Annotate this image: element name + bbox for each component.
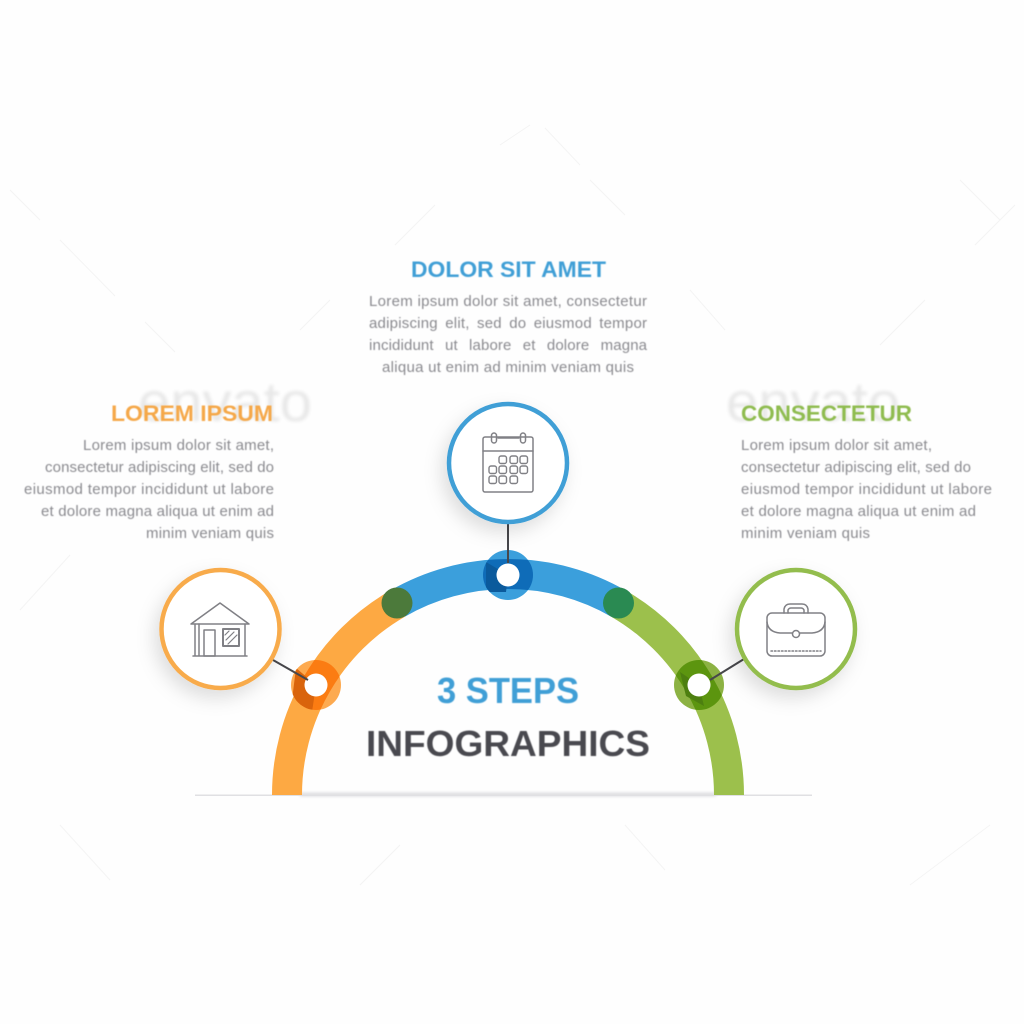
body: step 2: adipiscing elit, sed do eiusmod tempor bbox=[369, 315, 647, 332]
step 1 text block bbox=[24, 401, 274, 542]
watermark: left: envato bbox=[138, 370, 312, 433]
baseline shadow bbox=[195, 793, 812, 796]
watermark: right: envato bbox=[726, 370, 900, 433]
icon: calendar bbox=[483, 433, 533, 492]
title line: infographics: INFOGRAPHICS bbox=[366, 723, 650, 764]
body: step 1: Lorem ipsum dolor sit amet, bbox=[83, 437, 274, 454]
step 2 text block bbox=[369, 257, 648, 376]
band: blue segment bbox=[398, 574, 618, 604]
centre title bbox=[366, 670, 650, 764]
body: step 1: eiusmod tempor incididunt ut labore bbox=[24, 481, 274, 498]
connector: orange bbox=[273, 660, 308, 680]
connector: blue bbox=[507, 523, 509, 563]
icon circle: orange bbox=[162, 570, 280, 688]
body: step 1: minim veniam quis bbox=[146, 525, 274, 542]
body: step 3: eiusmod tempor incididunt ut labore bbox=[741, 481, 992, 498]
heading: consectetur: CONSECTETUR bbox=[741, 401, 912, 426]
heading: dolor sit amet: DOLOR SIT AMET bbox=[411, 257, 607, 282]
body: step 1: et dolore magna aliqua ut enim ad bbox=[41, 503, 274, 520]
icon: house bbox=[191, 603, 249, 656]
body: step 2 bbox=[369, 293, 648, 376]
body: step 2: incididunt ut labore et dolore magna bbox=[369, 337, 648, 354]
body: step 3 bbox=[741, 437, 992, 542]
body: step 3: consectetur adipiscing elit, sed do bbox=[741, 459, 971, 476]
step 3 text block bbox=[741, 401, 992, 542]
icon: briefcase bbox=[767, 604, 825, 656]
body: step 2: Lorem ipsum dolor sit amet, consectetur bbox=[369, 293, 647, 310]
junction: blue to green bbox=[603, 588, 634, 618]
body: step 2: aliqua ut enim ad minim veniam quis bbox=[382, 359, 634, 376]
junction: orange to blue bbox=[382, 588, 412, 618]
body: step 3: Lorem ipsum dolor sit amet, bbox=[741, 437, 932, 454]
body: step 1 bbox=[24, 437, 274, 542]
body: step 3: minim veniam quis bbox=[741, 525, 870, 542]
semicircular band bbox=[287, 574, 729, 795]
band: green segment bbox=[618, 604, 729, 795]
band: orange segment bbox=[287, 604, 398, 795]
title line: 3 steps: 3 STEPS bbox=[437, 670, 579, 711]
connector: green bbox=[710, 659, 744, 680]
icon circle: green bbox=[737, 570, 855, 688]
heading: lorem ipsum: LOREM IPSUM bbox=[111, 401, 273, 426]
body: step 1: consectetur adipiscing elit, sed do bbox=[45, 459, 274, 476]
icon circle: blue bbox=[449, 404, 567, 522]
step marker: blue bbox=[483, 550, 533, 600]
step marker: green bbox=[674, 660, 724, 710]
step marker: orange bbox=[291, 660, 341, 710]
body: step 3: et dolore magna aliqua ut enim ad bbox=[741, 503, 976, 520]
